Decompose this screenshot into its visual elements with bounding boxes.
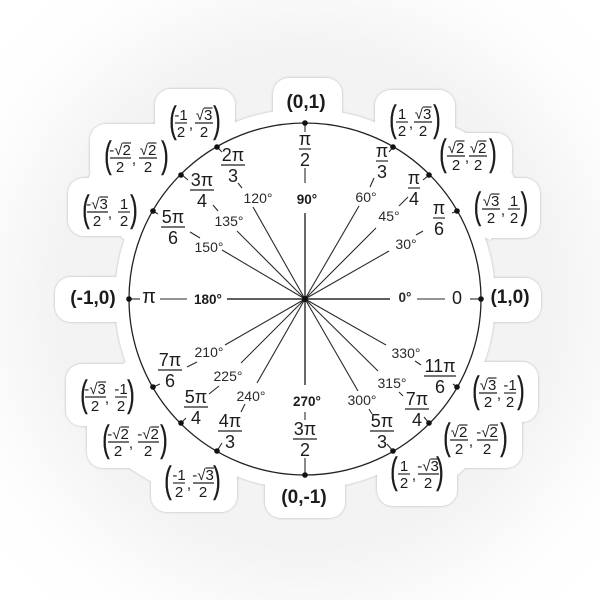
- circle point markers: [126, 120, 484, 478]
- radian labels: 4π: [219, 411, 241, 431]
- coordinate pair: -sqrt3/2, 1/2: 2: [120, 213, 128, 230]
- radian labels: 5π: [185, 387, 207, 407]
- coordinate pair: -sqrt3/2, 1/2: ,: [108, 205, 112, 222]
- coordinate pair: -sqrt2/2, -sqrt2/2: ,: [129, 435, 133, 452]
- coordinate pair: 1/2, -sqrt3/2: 2: [400, 475, 408, 492]
- coordinate pair: sqrt3/2, -1/2: 2: [484, 394, 492, 411]
- degree labels: [194, 189, 420, 409]
- coordinate pair: 1/2, sqrt3/2: (: [389, 99, 397, 140]
- coordinate pair: sqrt2/2, sqrt2/2: ): [489, 133, 497, 174]
- coordinate pair: 1/2, sqrt3/2: [389, 99, 441, 140]
- radian labels: 6: [165, 371, 175, 391]
- coordinate pair: sqrt3/2, -1/2: (: [472, 370, 480, 411]
- degree labels: 240°: [237, 388, 265, 404]
- radian labels: 4: [412, 410, 422, 430]
- coordinate pair: 1/2, -sqrt3/2: [390, 451, 444, 492]
- radian labels: 2: [300, 440, 310, 460]
- radian labels: 6: [434, 219, 444, 239]
- coordinate pair: -1/2, -sqrt3/2: ,: [187, 476, 191, 493]
- degree labels: 90°: [297, 192, 317, 207]
- radian labels: 6: [435, 377, 445, 397]
- coordinate pair: -sqrt2/2, -sqrt2/2: -√2: [107, 426, 129, 443]
- radian labels: 3: [377, 162, 387, 182]
- coordinate pair: sqrt2/2, -sqrt2/2: 2: [455, 441, 463, 458]
- radian labels: 4: [191, 408, 201, 428]
- radian labels: 3: [377, 432, 387, 452]
- coordinate pair: sqrt3/2, 1/2: 1: [510, 193, 518, 210]
- coordinate pair: 1/2, -sqrt3/2: -√3: [417, 458, 439, 475]
- coordinate pair: -1/2, -sqrt3/2: 2: [199, 484, 207, 501]
- radian labels: 3π: [294, 419, 316, 439]
- radian labels: 0: [452, 288, 462, 308]
- radian labels: 3: [225, 432, 235, 452]
- coordinate pair: sqrt3/2, 1/2: 2: [510, 210, 518, 227]
- coordinate pair: -sqrt2/2, sqrt2/2: √2: [140, 142, 156, 159]
- radian labels: 3: [228, 166, 238, 186]
- radian labels: 5π: [371, 411, 393, 431]
- coordinate pair: -sqrt3/2, -1/2: -1: [114, 381, 128, 398]
- coordinate pair: -sqrt2/2, -sqrt2/2: [102, 419, 168, 460]
- axis coordinates: (-1,0): [70, 288, 116, 309]
- coordinate pair: -1/2, sqrt3/2: ): [213, 100, 221, 141]
- coordinate pair: -sqrt3/2, -1/2: ): [127, 374, 135, 415]
- radian labels: 2π: [222, 145, 244, 165]
- coordinate pair: -sqrt2/2, -sqrt2/2: 2: [114, 443, 122, 460]
- coordinate pair: sqrt2/2, -sqrt2/2: ,: [469, 433, 473, 450]
- coordinate pair: -sqrt3/2, 1/2: (: [82, 189, 90, 230]
- coordinate pair: -sqrt2/2, sqrt2/2: -√2: [109, 142, 131, 159]
- coordinate pair: -sqrt3/2, -1/2: [80, 374, 135, 415]
- degree labels: 0°: [399, 290, 411, 305]
- axis coordinates: (0,-1): [281, 487, 327, 508]
- unit circle: [129, 123, 481, 475]
- coordinate pair: 1/2, -sqrt3/2: ,: [412, 467, 416, 484]
- coordinate pair: sqrt2/2, sqrt2/2: √2: [448, 140, 464, 157]
- coordinate pair: -1/2, -sqrt3/2: -1: [172, 467, 186, 484]
- degree labels: 30°: [395, 236, 417, 252]
- degree labels: 330°: [392, 345, 420, 361]
- degree labels: 270°: [293, 394, 321, 409]
- coordinate pair: -1/2, sqrt3/2: (: [169, 100, 177, 141]
- degree labels: 300°: [348, 392, 376, 408]
- coordinate pair: sqrt3/2, 1/2: ,: [501, 202, 505, 219]
- coordinate pair: -1/2, sqrt3/2: 2: [200, 124, 208, 141]
- coordinate pair: sqrt2/2, -sqrt2/2: 2: [483, 441, 491, 458]
- coordinate pair: sqrt3/2, -1/2: [472, 370, 525, 411]
- coordinate pair: -sqrt2/2, sqrt2/2: [104, 135, 169, 176]
- axis coordinates: (0,1): [286, 92, 326, 113]
- coordinate pair: -sqrt3/2, -1/2: ,: [105, 390, 109, 407]
- coordinate pair: 1/2, sqrt3/2: √3: [415, 106, 431, 123]
- coordinate pair: 1/2, sqrt3/2: 2: [419, 123, 427, 140]
- coordinate pair: -1/2, -sqrt3/2: 2: [175, 484, 183, 501]
- radian labels: 7π: [159, 350, 181, 370]
- coordinate pair: sqrt3/2, 1/2: (: [474, 186, 481, 227]
- coordinate pair: sqrt3/2, 1/2: √3: [483, 193, 499, 210]
- coordinate pair: -1/2, -sqrt3/2: (: [164, 460, 172, 501]
- degree labels: 135°: [215, 213, 243, 229]
- coordinate pair: -sqrt3/2, 1/2: -√3: [86, 196, 108, 213]
- coordinate pair: sqrt2/2, -sqrt2/2: √2: [451, 424, 467, 441]
- radian labels: 3π: [191, 170, 213, 190]
- coordinate pair: -1/2, sqrt3/2: -1: [174, 107, 188, 124]
- coordinate pair: -1/2, -sqrt3/2: ): [213, 460, 221, 501]
- coordinate pair: sqrt2/2, -sqrt2/2: ): [500, 417, 508, 458]
- coordinate pair: -sqrt2/2, sqrt2/2: 2: [116, 159, 124, 176]
- center hub: [302, 296, 308, 302]
- degree labels: 210°: [195, 344, 223, 360]
- coordinate pair: -sqrt3/2, 1/2: [82, 189, 138, 230]
- coordinate pair: sqrt3/2, -1/2: -1: [503, 377, 517, 394]
- degree labels: 60°: [355, 189, 377, 205]
- coordinate pair: 1/2, sqrt3/2: 2: [398, 123, 406, 140]
- coordinate pair: sqrt2/2, sqrt2/2: 2: [474, 157, 482, 174]
- coordinate pair: -1/2, sqrt3/2: 2: [177, 124, 185, 141]
- coordinate pair: 1/2, -sqrt3/2: (: [390, 451, 398, 492]
- coordinate pair: -sqrt3/2, 1/2: 1: [120, 196, 128, 213]
- degree labels: 225°: [214, 368, 242, 384]
- coordinate pair: -sqrt3/2, -1/2: 2: [117, 398, 125, 415]
- coordinate pair: 1/2, sqrt3/2: ,: [409, 115, 413, 132]
- coordinate pair: sqrt2/2, sqrt2/2: [439, 133, 497, 174]
- radian labels: 2: [300, 150, 310, 170]
- coordinate pair: sqrt2/2, sqrt2/2: √2: [470, 140, 486, 157]
- radian labels: 4: [409, 189, 419, 209]
- radian labels: 4: [197, 191, 207, 211]
- coordinate pair: -sqrt3/2, -1/2: 2: [91, 398, 99, 415]
- radian labels: π: [142, 286, 156, 308]
- coordinate pair: 1/2, sqrt3/2: ): [433, 99, 441, 140]
- coordinate pair: sqrt3/2, 1/2: 2: [487, 210, 495, 227]
- coordinate pair: 1/2, sqrt3/2: 1: [398, 106, 406, 123]
- coordinate pair: -sqrt2/2, -sqrt2/2: -√2: [137, 426, 159, 443]
- degree labels: 315°: [378, 375, 406, 391]
- degree labels: 180°: [194, 292, 222, 307]
- radian labels: π: [299, 129, 311, 149]
- coordinate pair: -sqrt2/2, sqrt2/2: (: [104, 135, 112, 176]
- radian labels: π: [408, 168, 420, 188]
- coordinate pair: -sqrt2/2, sqrt2/2: 2: [144, 159, 152, 176]
- coordinate pair: -sqrt3/2, 1/2: ): [130, 189, 138, 230]
- coordinate pair: 1/2, -sqrt3/2: 1: [400, 458, 408, 475]
- coordinate pair: sqrt2/2, sqrt2/2: 2: [452, 157, 460, 174]
- coordinate pair: 1/2, -sqrt3/2: ): [436, 451, 444, 492]
- coordinate pair: -sqrt3/2, 1/2: 2: [93, 213, 101, 230]
- radian labels: π: [376, 141, 388, 161]
- coordinate pair: -1/2, sqrt3/2: √3: [196, 107, 212, 124]
- radial lines: [129, 123, 481, 475]
- radian labels: 7π: [406, 389, 428, 409]
- radian labels: [142, 129, 462, 460]
- radian labels: 6: [168, 228, 178, 248]
- axis coordinates: [70, 92, 530, 508]
- coordinate pair: -sqrt2/2, -sqrt2/2: 2: [144, 443, 152, 460]
- coordinate pair: sqrt3/2, -1/2: ): [517, 370, 525, 411]
- coordinate pair: sqrt2/2, -sqrt2/2: -√2: [476, 424, 498, 441]
- coordinate pair: -1/2, sqrt3/2: [169, 100, 221, 141]
- coordinate pair: -1/2, -sqrt3/2: -√3: [192, 467, 214, 484]
- coordinate pair: -1/2, sqrt3/2: ,: [189, 116, 193, 133]
- coordinate pair: -sqrt3/2, -1/2: -√3: [84, 381, 106, 398]
- radian labels: 11π: [424, 356, 456, 376]
- radian labels: π: [433, 198, 445, 218]
- coordinate pair: sqrt3/2, -1/2: 2: [506, 394, 514, 411]
- radian labels: 5π: [162, 207, 184, 227]
- coordinate pair: sqrt3/2, 1/2: ): [521, 186, 528, 227]
- degree labels: 120°: [244, 190, 272, 206]
- coordinate pair: sqrt2/2, -sqrt2/2: [443, 417, 508, 458]
- coordinate pair: sqrt3/2, -1/2: ,: [497, 386, 501, 403]
- coordinate pair: -sqrt3/2, -1/2: (: [80, 374, 88, 415]
- degree labels: 150°: [195, 239, 223, 255]
- coordinate pair: -sqrt2/2, -sqrt2/2: (: [102, 419, 110, 460]
- coordinate pair: 1/2, -sqrt3/2: 2: [424, 475, 432, 492]
- sticker backing: [55, 78, 541, 518]
- coordinate pair: sqrt2/2, sqrt2/2: ,: [465, 149, 469, 166]
- coordinate pair: sqrt2/2, sqrt2/2: (: [439, 133, 447, 174]
- axis coordinates: (1,0): [490, 287, 530, 308]
- coordinate pair: sqrt3/2, 1/2: [474, 186, 528, 227]
- coordinate pair: sqrt3/2, -1/2: √3: [480, 377, 496, 394]
- coordinate pair: -sqrt2/2, -sqrt2/2: ): [160, 419, 168, 460]
- coordinate pair: -1/2, -sqrt3/2: [164, 460, 221, 501]
- coordinate pair: -sqrt2/2, sqrt2/2: ,: [132, 151, 136, 168]
- coordinate pair: -sqrt2/2, sqrt2/2: ): [161, 135, 169, 176]
- coordinate pair: sqrt2/2, -sqrt2/2: (: [443, 417, 451, 458]
- degree labels: 45°: [378, 208, 400, 224]
